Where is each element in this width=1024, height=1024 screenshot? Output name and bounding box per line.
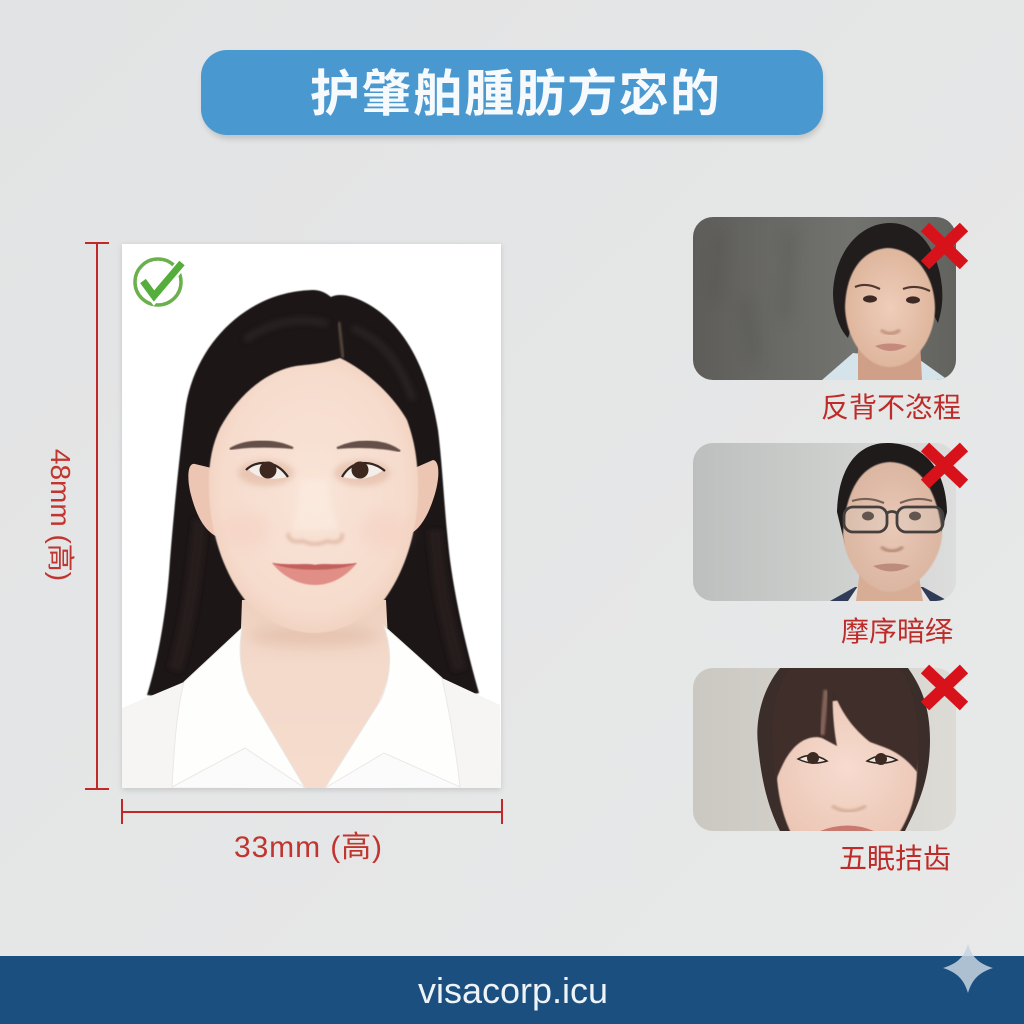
icon: red cross (925, 447, 964, 484)
eyes (248, 463, 287, 479)
main photo: compliant portrait (122, 244, 501, 790)
parting (339, 322, 343, 358)
icon: red cross (925, 669, 964, 706)
icon: sparkle star (943, 944, 993, 993)
shirt shoulders (122, 674, 254, 788)
neck (240, 600, 391, 788)
lips (272, 563, 357, 585)
face (209, 358, 418, 633)
height label: 48mm (高) (45, 449, 76, 581)
panel: wrong example, glasses (693, 443, 964, 647)
footer bar: visacorp.icu (418, 970, 608, 1011)
icon: red cross (925, 227, 964, 265)
panel: wrong example, dark background (693, 217, 964, 423)
width dimension line (122, 799, 502, 824)
nose (298, 484, 334, 527)
collar (172, 628, 305, 788)
title banner: 护肇舶腫肪方宓的 (310, 66, 720, 122)
height dimension line (85, 243, 109, 789)
eye shadows (238, 460, 294, 486)
panel: wrong example, bangs and crop (693, 668, 964, 874)
caption: 五眠拮齿 (839, 843, 951, 874)
title banner (201, 50, 823, 139)
hair (147, 290, 479, 700)
ears (188, 464, 216, 536)
eyebrows (230, 441, 293, 449)
caption: 反背不恣程 (821, 392, 961, 423)
icon: green check mark (135, 259, 183, 305)
footer bar (0, 956, 1024, 1024)
width label: 33mm (高) (234, 831, 382, 864)
caption: 摩序暗绎 (841, 616, 953, 647)
cheeks (221, 512, 269, 548)
